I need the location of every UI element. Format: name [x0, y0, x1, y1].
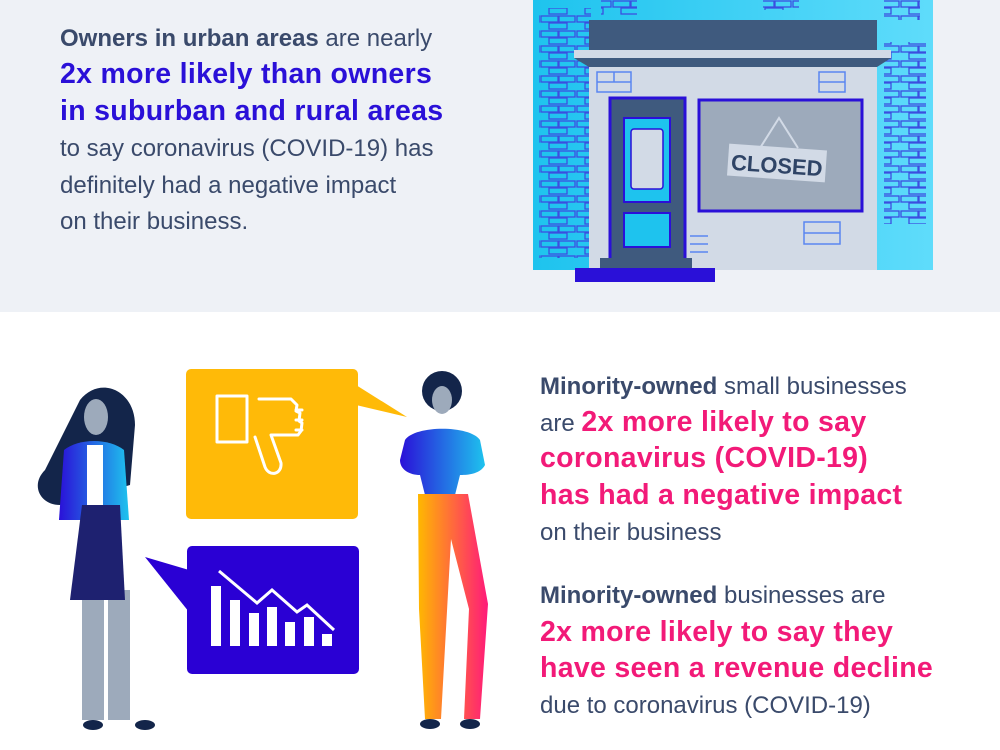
text block: urban owners: in suburban and rural areas — [60, 95, 443, 127]
text block: urban owners: to say coronavirus (COVID-19) has — [60, 135, 433, 162]
text block: urban owners: 2x more likely than owners — [60, 58, 432, 90]
woman left — [38, 388, 155, 730]
text block: urban owners: on their business. — [60, 208, 248, 235]
text block: minority-owned negative impact: are 2x more likely to say — [540, 406, 866, 438]
blue chart bubble — [145, 546, 359, 674]
text block: urban owners: Owners in urban areas are nearly — [60, 25, 432, 52]
text block: minority-owned revenue decline — [540, 582, 933, 719]
illustration: closed storefront — [533, 0, 933, 282]
illustration: closed storefront: CLOSED — [730, 150, 823, 181]
text block: minority-owned negative impact: coronavirus (COVID-19) — [540, 442, 868, 474]
yellow bubble — [186, 369, 407, 519]
text block: urban owners: definitely had a negative impact — [60, 172, 396, 199]
text block: minority-owned revenue decline: have seen a revenue decline — [540, 652, 933, 684]
panel: top section background — [0, 0, 1000, 312]
woman right — [400, 371, 488, 729]
text block: minority-owned negative impact: has had a negative impact — [540, 479, 902, 511]
text block: minority-owned revenue decline: due to coronavirus (COVID-19) — [540, 692, 871, 719]
text block: urban owners — [60, 25, 443, 235]
text block: minority-owned negative impact — [540, 373, 907, 546]
illustration: women with speech bubbles — [38, 369, 488, 730]
text block: minority-owned revenue decline: Minority-owned businesses are — [540, 582, 885, 609]
text block: minority-owned negative impact: Minority-owned small businesses — [540, 373, 907, 400]
text block: minority-owned negative impact: on their business — [540, 519, 721, 546]
text block: minority-owned revenue decline: 2x more likely to say they — [540, 616, 893, 648]
